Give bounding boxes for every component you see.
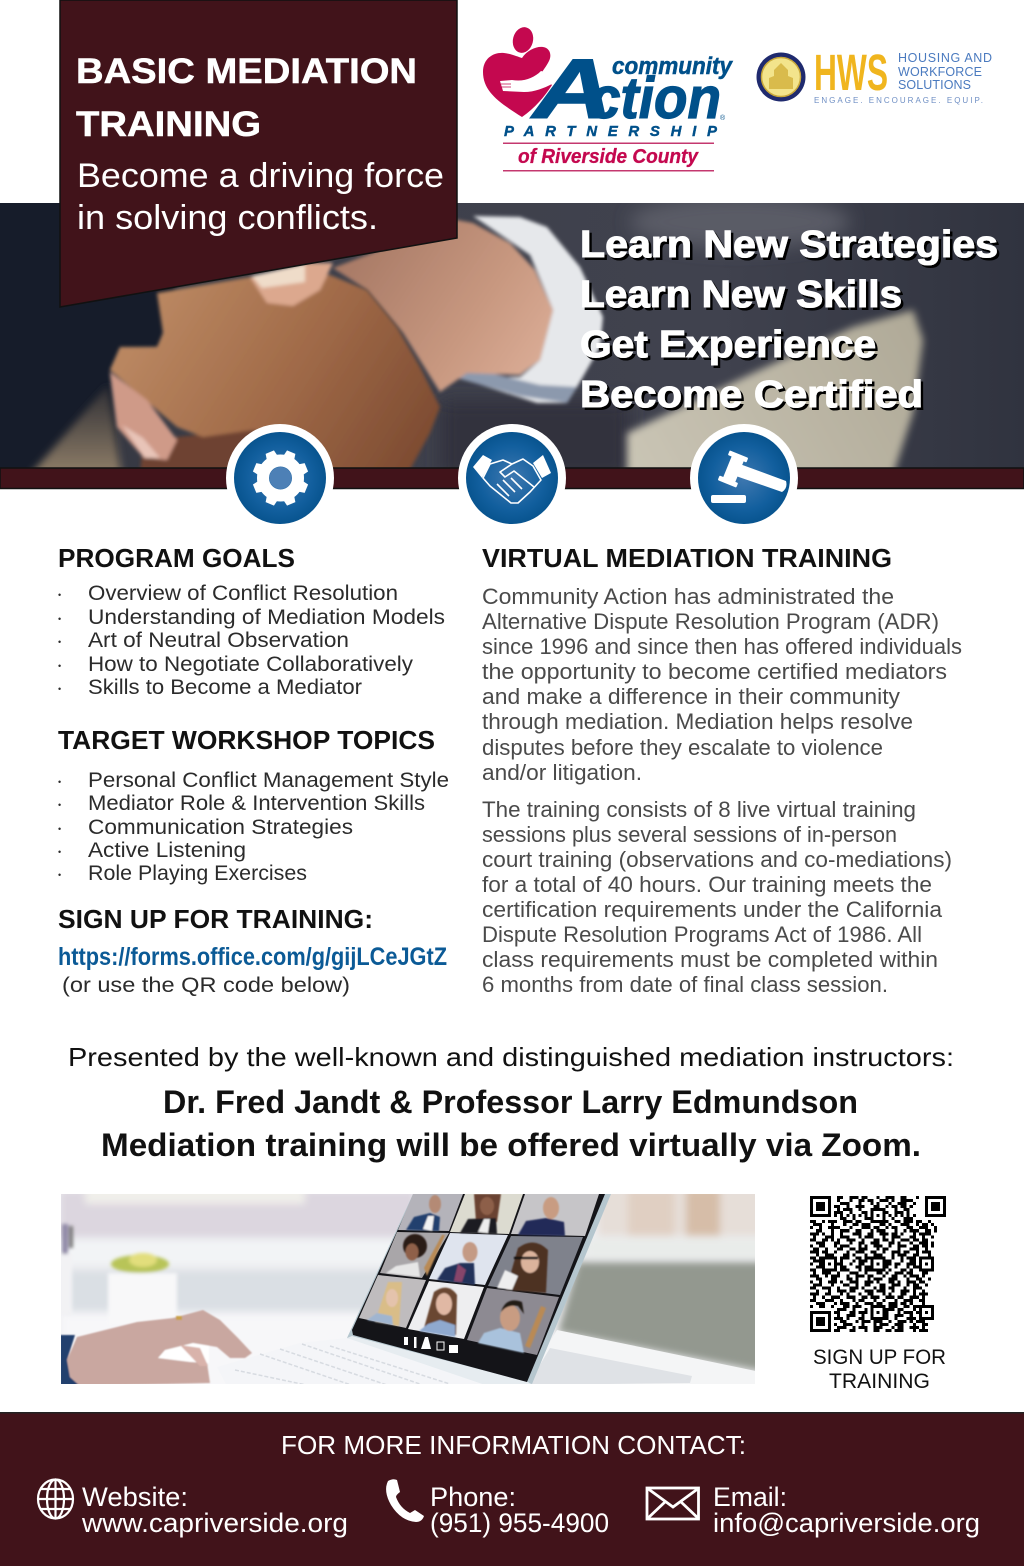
topics list: Active Listening (88, 838, 246, 862)
presenters names: Dr. Fred Jandt & Professor Larry Edmundson (163, 1084, 858, 1120)
goals list: Art of Neutral Observation (88, 628, 349, 652)
tagline: ENGAGE. ENCOURAGE. EQUIP. (814, 96, 983, 105)
slogan 4: Become Certified (580, 374, 923, 416)
paragraph 2: for a total of 40 hours. Our training meets the (482, 872, 932, 897)
paragraph 1: disputes before they escalate to violence (482, 735, 883, 760)
HWS letters: HWS (814, 44, 888, 101)
plant pot (60, 1224, 177, 1325)
heading: SIGN UP FOR TRAINING: (58, 904, 373, 934)
topics list: Role Playing Exercises (88, 861, 307, 885)
goals list: • (58, 614, 61, 624)
paragraph 2: Dispute Resolution Programs Act of 1986. All (482, 922, 922, 947)
paragraph 1: and/or litigation. (482, 760, 642, 785)
laptop lid (347, 1194, 611, 1384)
email (713, 1482, 980, 1538)
dark hand (110, 263, 440, 475)
title: BASIC MEDIATION (76, 52, 417, 91)
icon: envelope (647, 1488, 699, 1519)
paragraph 1: since 1996 and since then has offered individuals (482, 634, 962, 659)
phone: Phone: (430, 1482, 516, 1512)
keyboard (217, 1338, 532, 1392)
panel: target workshop topics (58, 725, 449, 885)
slogan 1: Learn New Strategies (580, 224, 998, 266)
community wordmark: community (612, 53, 734, 80)
topics list: Communication Strategies (88, 815, 353, 839)
hand (60, 1310, 252, 1386)
icon: globe (38, 1480, 73, 1518)
paragraph 2: 6 months from date of final class session. (482, 972, 888, 997)
qr note: (or use the QR code below) (62, 973, 350, 997)
paragraph 1: Alternative Dispute Resolution Program (ADR) (482, 609, 939, 634)
title second line: TRAINING (76, 105, 261, 144)
paragraph 1 (482, 584, 962, 785)
phone (430, 1482, 609, 1538)
goals list: • (58, 637, 61, 647)
table (554, 1330, 755, 1378)
topics list: • (58, 870, 61, 880)
paragraph 2: certification requirements under the California (482, 897, 943, 922)
icon: gavel (690, 424, 798, 532)
topics list: • (58, 777, 61, 787)
topics list: Mediator Role & Intervention Skills (88, 791, 425, 815)
subtitle line 1: Become a driving force (77, 157, 444, 195)
goals list: How to Negotiate Collaboratively (88, 652, 413, 676)
phone: (951) 955-4900 (430, 1508, 609, 1538)
icon: phone (386, 1479, 424, 1522)
Action wordmark: A: A (530, 42, 613, 136)
icon: gear (226, 424, 334, 532)
QR caption (813, 1346, 946, 1393)
logo: HWS (756, 44, 992, 105)
website: Website: (82, 1482, 188, 1512)
paragraph 1: and make a difference in their community (482, 684, 900, 709)
topics list: • (58, 847, 61, 857)
topics list: • (58, 824, 61, 834)
registered mark: ® (720, 114, 726, 122)
logo: Community Action Partnership (483, 25, 734, 172)
slogan 2: Learn New Skills (580, 274, 902, 316)
photo: video call on laptop (50, 1188, 768, 1392)
housing and: HOUSING AND (898, 51, 992, 65)
slogan 3: Get Experience (580, 324, 876, 366)
Action wordmark: ction: ction (590, 66, 721, 131)
contact heading: FOR MORE INFORMATION CONTACT: (281, 1430, 746, 1460)
video call people (367, 1194, 565, 1353)
paragraph 2 (482, 797, 952, 997)
workforce: WORKFORCE (898, 65, 982, 79)
email: Email: (713, 1482, 787, 1512)
icon: handshake (458, 424, 566, 532)
icon: county seal (756, 52, 806, 102)
laptop base (528, 1348, 692, 1385)
topics list: • (58, 800, 61, 810)
paragraph 2: The training consists of 8 live virtual training (482, 797, 916, 822)
topics list: Personal Conflict Management Style (88, 768, 449, 792)
heading: VIRTUAL MEDIATION TRAINING (482, 543, 892, 573)
paragraph 2: class requirements must be completed within (482, 947, 938, 972)
panel: sign up (58, 904, 447, 997)
panel: virtual mediation training (482, 543, 962, 997)
website (81, 1482, 348, 1538)
panel: program goals (58, 543, 445, 699)
right hand (333, 216, 603, 403)
QR caption: SIGN UP FOR (813, 1346, 946, 1369)
call toolbar icons (404, 1337, 458, 1353)
paragraph 2: court training (observations and co-mediations) (482, 847, 952, 872)
heading: TARGET WORKSHOP TOPICS (58, 725, 435, 755)
goals list: • (58, 684, 61, 694)
maroon band (0, 468, 1024, 488)
goals list: • (58, 590, 61, 600)
video call tiles (359, 1194, 599, 1355)
QR code (810, 1196, 946, 1332)
zoom note: Mediation training will be offered virtually via Zoom. (101, 1127, 921, 1163)
of Riverside County: of Riverside County (518, 146, 699, 168)
title panel (60, 0, 457, 307)
paragraph 1: through mediation. Mediation helps resolve (482, 709, 913, 734)
panel: contact footer (0, 1412, 1024, 1566)
paragraph 1: the opportunity to become certified mediators (482, 659, 947, 684)
rule bottom (503, 170, 714, 172)
goals list (58, 581, 445, 699)
paragraph 1: Community Action has administrated the (482, 584, 894, 609)
presenters intro: Presented by the well-known and distinguished mediation instructors: (68, 1042, 954, 1072)
hero photo: handshake (0, 195, 1024, 480)
left dark jacket (0, 195, 175, 480)
hero slogans (580, 224, 998, 416)
goals list: Overview of Conflict Resolution (88, 581, 398, 605)
goals list: Skills to Become a Mediator (88, 675, 362, 699)
goals list: • (58, 661, 61, 671)
PARTNERSHIP wordmark: PARTNERSHIP (504, 123, 718, 140)
topics list (58, 768, 449, 885)
website: www.capriverside.org (81, 1508, 348, 1538)
link: https://forms.office.com/g/gijLCeJGtZ (58, 943, 447, 971)
paragraph 2: sessions plus several sessions of in-person (482, 822, 897, 847)
subtitle line 2: in solving conflicts. (77, 199, 378, 237)
blurred background (50, 1188, 768, 1392)
icon: heart with hug (483, 25, 561, 117)
email: info@capriverside.org (713, 1508, 980, 1538)
rule top (503, 142, 714, 144)
solutions: SOLUTIONS (898, 78, 971, 92)
QR caption: TRAINING (829, 1370, 930, 1393)
heading: PROGRAM GOALS (58, 543, 295, 573)
goals list: Understanding of Mediation Models (88, 605, 445, 629)
